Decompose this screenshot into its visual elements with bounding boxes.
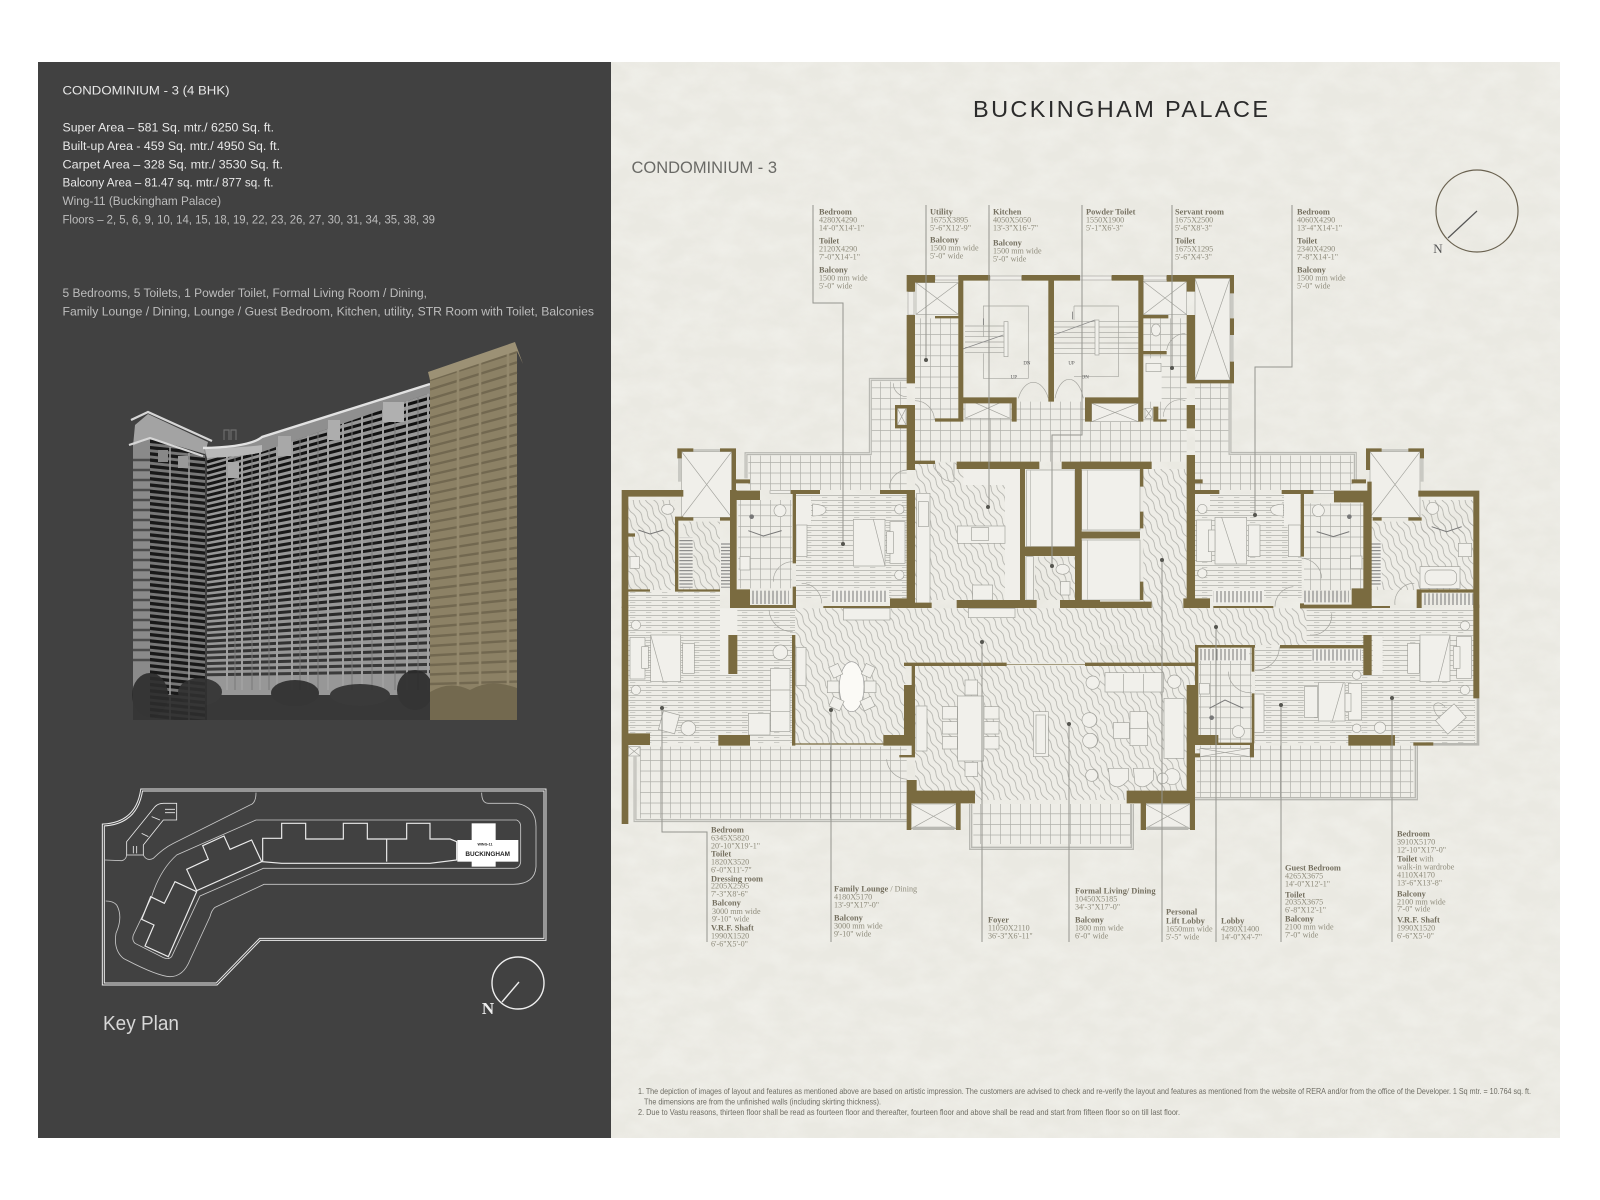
icon: key plan north compass: N xyxy=(482,999,495,1018)
room label: bedroom top right: Bedroom xyxy=(1297,208,1330,217)
room label: powder toilet: Powder Toilet xyxy=(1086,208,1136,217)
room label: guest bedroom: 2035X3675 xyxy=(1285,898,1323,907)
room label: guest bedroom: 6'-8"X12'-1" xyxy=(1285,906,1326,915)
leader lines xyxy=(662,205,1392,942)
panel: dark info panel xyxy=(38,62,611,1138)
room label: family lounge: 9'-10" wide xyxy=(834,930,872,939)
icon: north compass xyxy=(1433,170,1518,256)
room label: bedroom bottom right: Toilet with xyxy=(1397,855,1434,864)
room label: family lounge xyxy=(834,885,917,939)
walls xyxy=(622,275,1479,830)
room label: lobby xyxy=(1221,917,1262,942)
room label: bedroom bottom right: 3910X5170 xyxy=(1397,838,1435,847)
room label: kitchen: 4050X5050 xyxy=(993,216,1031,225)
room label: servant room: 5'-6"X4'-3" xyxy=(1175,253,1212,262)
text block: room summary xyxy=(62,286,594,318)
floor finishes xyxy=(628,278,1478,848)
room label: bedroom top right: 13'-4"X14'-1" xyxy=(1297,224,1342,233)
room label: utility: 1500 mm wide xyxy=(930,244,979,253)
floor finishes: DN xyxy=(1023,362,1031,367)
room label: bedroom bottom right: 7'-0" wide xyxy=(1397,905,1431,914)
room label: bedroom bottom right: 1990X1520 xyxy=(1397,924,1435,933)
trees xyxy=(132,670,433,720)
roads xyxy=(105,793,536,977)
room label: family lounge: 13'-9"X17'-0" xyxy=(834,901,879,910)
room label: bedroom bottom right: 2100 mm wide xyxy=(1397,897,1446,906)
room label: bedroom bottom left: 6'-0"X11'-7" xyxy=(711,866,752,875)
label: key plan: Key Plan xyxy=(103,1013,179,1035)
room label: formal living and dining: Formal Living/ Dining xyxy=(1075,887,1156,896)
room label: bedroom top left: 1500 mm wide xyxy=(819,274,868,283)
room label: guest bedroom: Toilet xyxy=(1285,891,1305,900)
text block: areas and floors xyxy=(62,120,435,226)
floor plan xyxy=(622,205,1479,942)
room label: foyer: 11050X2110 xyxy=(988,924,1030,933)
room label: bedroom bottom left: V.R.F. Shaft xyxy=(711,924,754,933)
room label: bedroom top right: 4060X4290 xyxy=(1297,216,1335,225)
room label: bedroom top left: 7'-0"X14'-1" xyxy=(819,253,860,262)
room label: bedroom top right: 2340X4290 xyxy=(1297,245,1335,254)
room label: bedroom bottom left: Dressing room xyxy=(711,875,763,884)
room label: bedroom bottom right: V.R.F. Shaft xyxy=(1397,916,1440,925)
room label: lobby: 14'-0"X4'-7" xyxy=(1221,933,1262,942)
middle wing xyxy=(203,384,430,720)
room label: formal living and dining: Balcony xyxy=(1075,916,1105,925)
highlighted wing: BUCKINGHAM xyxy=(465,851,510,858)
room label: kitchen xyxy=(993,208,1042,264)
room label: utility: 5'-0" wide xyxy=(930,252,964,261)
room label: powder toilet: 1550X1900 xyxy=(1086,216,1124,225)
room label: bedroom top left: 14'-0"X14'-1" xyxy=(819,224,864,233)
room label: bedroom bottom right: 12'-10"X17'-0" xyxy=(1397,846,1446,855)
windows and wall openings xyxy=(678,276,1424,493)
room label: utility xyxy=(930,208,979,261)
text block: areas and floors: Super Area – 581 Sq. mtr./ 6250 Sq. ft. xyxy=(62,120,274,134)
heading: unit type: CONDOMINIUM - 3 (4 BHK) xyxy=(62,84,229,98)
key plan site drawing xyxy=(103,790,545,984)
room label: bedroom bottom left: 2205X2595 xyxy=(711,882,749,891)
room label: foyer: Foyer xyxy=(988,916,1009,925)
room label: bedroom bottom left: 6'-6"X5'-0" xyxy=(711,940,748,949)
room label: bedroom bottom left: 6345X5820 xyxy=(711,834,749,843)
room label: guest bedroom: 14'-0"X12'-1" xyxy=(1285,880,1330,889)
room label: bedroom bottom left: 7'-3"X8'-6" xyxy=(711,890,748,899)
highlighted tower xyxy=(428,342,523,720)
room label: guest bedroom: 4265X3675 xyxy=(1285,872,1323,881)
room label: guest bedroom xyxy=(1285,864,1341,940)
left wing xyxy=(129,412,212,720)
room label: bedroom bottom right: walk-in wardrobe xyxy=(1397,863,1455,872)
room label: guest bedroom: 2100 mm wide xyxy=(1285,923,1334,932)
room label: bedroom bottom right: 4110X4170 xyxy=(1397,871,1435,880)
room label: bedroom top right xyxy=(1297,208,1346,291)
room label: bedroom top left: 2120X4290 xyxy=(819,245,857,254)
room label: bedroom bottom left: Balcony xyxy=(712,899,742,908)
footnotes: The dimensions are from the unfinished walls (including skirting thickness). xyxy=(644,1096,881,1106)
building illustration xyxy=(129,342,523,720)
room label: bedroom top left: 4280X4290 xyxy=(819,216,857,225)
room label: bedroom bottom left: 1990X1520 xyxy=(711,932,749,941)
room label: family lounge: Balcony xyxy=(834,914,864,923)
room label: servant room xyxy=(1175,208,1224,262)
text block: areas and floors: Wing-11 (Buckingham Palace) xyxy=(62,194,221,208)
room label: lobby: Lobby xyxy=(1221,917,1245,926)
room label: utility: Balcony xyxy=(930,236,960,245)
room label: servant room: Toilet xyxy=(1175,237,1195,246)
room label: formal living and dining xyxy=(1075,887,1156,941)
room label: lobby: 4280X1400 xyxy=(1221,925,1259,934)
room label: personal lift lobby: 1650mm wide xyxy=(1166,925,1213,934)
room label: bedroom top right: Balcony xyxy=(1297,266,1327,275)
room label: bedroom top right: 5'-0" wide xyxy=(1297,282,1331,291)
room label: bedroom bottom left: 9'-10" wide xyxy=(712,915,750,924)
room label: bedroom top left xyxy=(819,208,868,291)
room label: personal lift lobby: 5'-5" wide xyxy=(1166,933,1200,942)
floor finishes: UP xyxy=(1068,361,1075,366)
room label: servant room: 1675X1295 xyxy=(1175,245,1213,254)
room label: bedroom top left: Bedroom xyxy=(819,208,852,217)
room label: servant room: 1675X2500 xyxy=(1175,216,1213,225)
room label: formal living and dining: 1800 mm wide xyxy=(1075,924,1124,933)
room label: guest bedroom: 7'-0" wide xyxy=(1285,931,1319,940)
room label: personal lift lobby: Personal xyxy=(1166,908,1198,917)
room label: bedroom top right: Toilet xyxy=(1297,237,1317,246)
text block: areas and floors: Balcony Area – 81.47 sq. mtr./ 877 sq. ft. xyxy=(62,176,274,190)
room label: kitchen: 13'-3"X16'-7" xyxy=(993,224,1038,233)
room label: powder toilet: 5'-1"X6'-3" xyxy=(1086,224,1123,233)
highlighted wing: WING-11 xyxy=(477,843,493,847)
room label: bedroom bottom left: Bedroom xyxy=(711,826,744,835)
room label: family lounge: 3000 mm wide xyxy=(834,922,883,931)
room label: family lounge: 4180X5170 xyxy=(834,893,872,902)
room label: kitchen: Kitchen xyxy=(993,208,1022,217)
room label: personal lift lobby xyxy=(1166,908,1213,942)
room label: bedroom bottom left: 20'-10"X19'-1" xyxy=(711,842,760,851)
room label: guest bedroom: Guest Bedroom xyxy=(1285,864,1341,873)
room label: personal lift lobby: Lift Lobby xyxy=(1166,916,1206,925)
panel: paper floor plan sheet xyxy=(611,62,1560,1138)
icon: north compass: N xyxy=(1433,241,1443,256)
room label: bedroom bottom left xyxy=(711,826,763,949)
site boundary xyxy=(103,790,545,984)
room label: bedroom bottom left: 3000 mm wide xyxy=(712,907,761,916)
room label: foyer xyxy=(988,916,1033,941)
room label: guest bedroom: Balcony xyxy=(1285,915,1315,924)
title: BUCKINGHAM PALACE xyxy=(973,96,1268,122)
icon: key plan north compass xyxy=(482,957,544,1018)
leader end dots xyxy=(660,358,1394,726)
room label: bedroom top left: Balcony xyxy=(819,266,849,275)
room label: bedroom bottom right: 6'-6"X5'-0" xyxy=(1397,932,1434,941)
room label: bedroom bottom right: Bedroom xyxy=(1397,830,1430,839)
room label: bedroom top left: Toilet xyxy=(819,237,839,246)
room label: bedroom top right: 7'-8"X14'-1" xyxy=(1297,253,1338,262)
text block: areas and floors: Built-up Area - 459 Sq. mtr./ 4950 Sq. ft. xyxy=(62,139,280,153)
footnotes xyxy=(638,1086,1531,1117)
room label: kitchen: 1500 mm wide xyxy=(993,247,1042,256)
room label: servant room: 5'-6"X8'-3" xyxy=(1175,224,1212,233)
room label: bedroom bottom left: Toilet xyxy=(711,850,731,859)
text block: room summary: 5 Bedrooms, 5 Toilets, 1 Powder Toilet, Formal Living Room / Dining, xyxy=(62,286,427,300)
tower footprints xyxy=(127,803,457,957)
room label: bedroom bottom right xyxy=(1397,830,1455,941)
room label: bedroom top right: 1500 mm wide xyxy=(1297,274,1346,283)
room label: bedroom bottom right: Balcony xyxy=(1397,889,1427,898)
text block: room summary: Family Lounge / Dining, Lounge / Guest Bedroom, Kitchen, utility, STR Room with Toilet, Balconies xyxy=(62,304,594,318)
highlighted wing xyxy=(457,823,518,867)
room label: utility: 1675X3895 xyxy=(930,216,968,225)
room label: family lounge: Family Lounge / Dining xyxy=(834,885,917,894)
text block: areas and floors: Floors – 2, 5, 6, 9, 10, 14, 15, 18, 19, 22, 23, 26, 27, 30, 31, 34, 35, 38, 39 xyxy=(62,212,435,226)
room label: servant room: Servant room xyxy=(1175,208,1224,217)
subtitle: CONDOMINIUM - 3 xyxy=(632,159,777,177)
room label: powder toilet xyxy=(1086,208,1136,233)
room label: bedroom bottom right: 13'-6"X13'-8" xyxy=(1397,878,1442,887)
room label: utility: 5'-6"X12'-9" xyxy=(930,224,971,233)
room label: bedroom bottom left: 1820X3520 xyxy=(711,858,749,867)
footnotes: 2. Due to Vastu reasons, thirteen floor shall be read as fourteen floor and thereafter, fourteen floor and above shall be read and start from fifteen floor so on till last floor. xyxy=(638,1107,1180,1117)
floor finishes: UP xyxy=(1011,376,1017,381)
room label: formal living and dining: 10450X5185 xyxy=(1075,895,1117,904)
room label: foyer: 36'-3"X6'-11" xyxy=(988,932,1033,941)
room label: utility: Utility xyxy=(930,208,954,217)
room label: formal living and dining: 34'-3"X17'-0" xyxy=(1075,903,1120,912)
room label: kitchen: 5'-0" wide xyxy=(993,255,1027,264)
room label: formal living and dining: 6'-0" wide xyxy=(1075,932,1109,941)
room label: bedroom top left: 5'-0" wide xyxy=(819,282,853,291)
floor finishes: DN xyxy=(1082,376,1089,381)
text block: areas and floors: Carpet Area – 328 Sq. mtr./ 3530 Sq. ft. xyxy=(62,158,283,172)
room label: kitchen: Balcony xyxy=(993,239,1023,248)
